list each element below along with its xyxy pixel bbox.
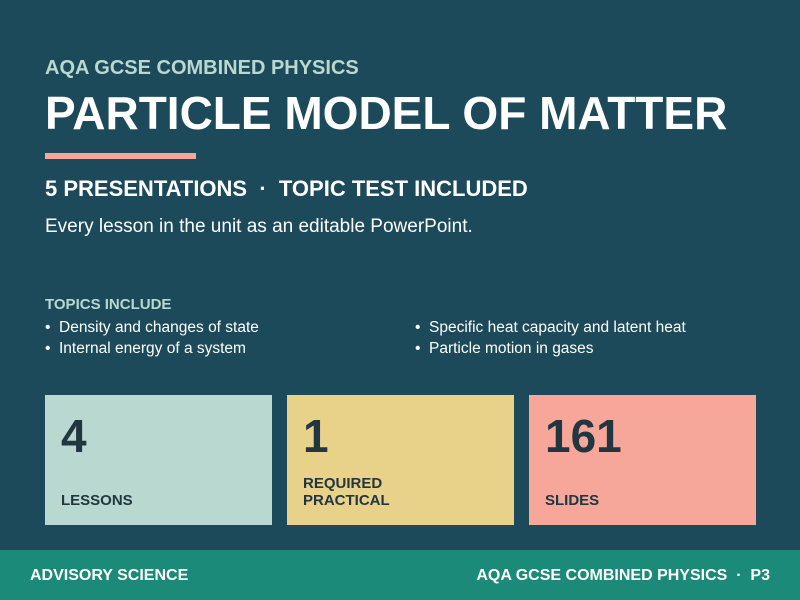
accent bar (45, 153, 196, 159)
footer course label: AQA GCSE COMBINED PHYSICS · P3 (476, 567, 770, 584)
stat card: lessons: 4 (61, 410, 87, 462)
eyebrow heading: AQA GCSE COMBINED PHYSICS (45, 57, 359, 79)
stat card: lessons: LESSONS (61, 492, 133, 509)
topics list: right column: • (415, 340, 420, 357)
topics list: right column: • (415, 319, 420, 336)
topics list: right column: Specific heat capacity and latent heat (429, 319, 686, 336)
stat card: required practical: PRACTICAL (303, 492, 390, 509)
topics list: right column (415, 319, 686, 357)
subtitle: 5 PRESENTATIONS · TOPIC TEST INCLUDED (45, 176, 528, 201)
stat card: required practical: 1 (303, 410, 329, 462)
footer band (0, 550, 800, 600)
footer brand: ADVISORY SCIENCE (30, 567, 188, 584)
stat card: required practical: REQUIRED (303, 475, 382, 492)
stat card: slides (529, 395, 756, 525)
topics list: left column: Internal energy of a system (59, 340, 246, 357)
topics list: left column: Density and changes of state (59, 319, 259, 336)
title: PARTICLE MODEL OF MATTER (45, 87, 727, 139)
topics list: left column: • (45, 319, 50, 336)
stat card: required practical (287, 395, 514, 525)
topics heading: TOPICS INCLUDE (45, 296, 171, 313)
topics list: left column (45, 319, 259, 357)
topics list: left column: • (45, 340, 50, 357)
stat card: slides: SLIDES (545, 492, 599, 509)
topics list: right column: Particle motion in gases (429, 340, 594, 357)
stat card: lessons (45, 395, 272, 525)
description: Every lesson in the unit as an editable PowerPoint. (45, 216, 473, 237)
stat card: slides: 161 (545, 410, 622, 462)
